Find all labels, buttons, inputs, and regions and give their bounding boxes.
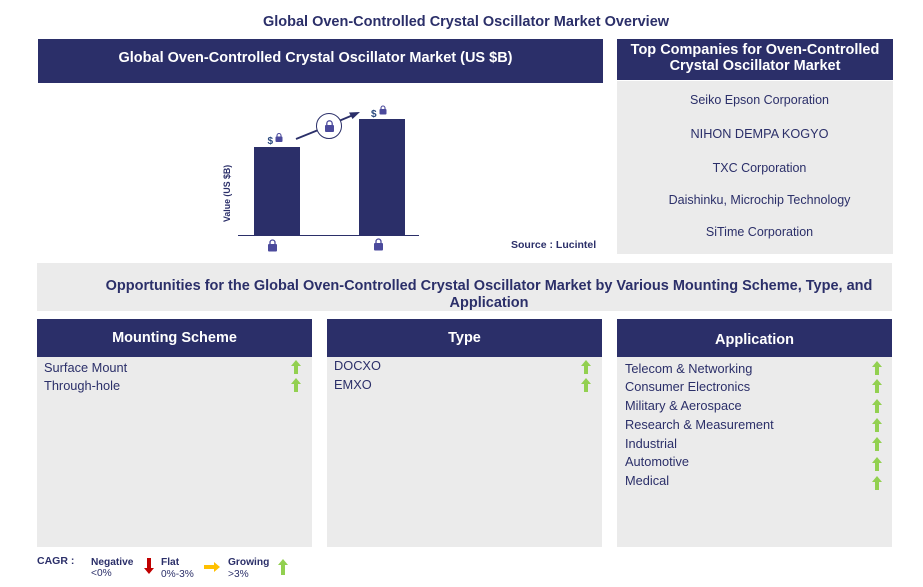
CAGR circle with lock xyxy=(316,114,342,138)
panel: mounting scheme xyxy=(37,319,312,547)
companies header: Crystal Oscillator Market xyxy=(670,58,840,74)
flat label xyxy=(161,557,194,580)
companies panel xyxy=(617,81,893,254)
item: EMXO xyxy=(334,377,372,392)
item: Research & Measurement xyxy=(625,417,774,432)
green up arrow xyxy=(278,559,288,575)
heading: Type xyxy=(448,330,481,346)
arrow xyxy=(291,378,301,392)
company: NIHON DEMPA KOGYO xyxy=(691,127,828,141)
growing label: Growing xyxy=(228,557,269,568)
value label left: $ xyxy=(268,136,274,147)
item: Industrial xyxy=(625,436,677,451)
companies header xyxy=(617,39,893,80)
item: Medical xyxy=(625,473,669,488)
heading: Mounting Scheme xyxy=(112,330,237,346)
chart panel header: Global Oven-Controlled Crystal Oscillator Market (US $B) xyxy=(118,50,512,66)
negative label: <0% xyxy=(91,568,112,579)
CAGR legend xyxy=(37,555,288,580)
value label right: $ xyxy=(371,109,377,120)
growing label: >3% xyxy=(228,569,249,580)
companies header: Top Companies for Oven-Controlled xyxy=(631,42,879,58)
arrow xyxy=(872,457,882,471)
arrow xyxy=(872,361,882,375)
item: DOCXO xyxy=(334,358,381,373)
value label right xyxy=(371,106,386,120)
company: SiTime Corporation xyxy=(706,225,813,239)
item: Surface Mount xyxy=(44,360,127,375)
growing label xyxy=(228,557,269,580)
panel: application xyxy=(617,319,892,547)
panel: type xyxy=(327,319,602,547)
item: Military & Aerospace xyxy=(625,398,742,413)
opportunities heading: Opportunities for the Global Oven-Controlled Crystal Oscillator Market by Various Mounting Scheme, Type, and Application xyxy=(106,278,872,311)
company: Seiko Epson Corporation xyxy=(690,93,829,107)
bars xyxy=(254,119,405,235)
heading: Application xyxy=(715,332,794,348)
value label left xyxy=(268,134,282,147)
arrow xyxy=(872,418,882,432)
opportunities heading xyxy=(37,263,892,311)
red down arrow xyxy=(144,558,154,574)
arrow xyxy=(872,476,882,490)
legend title: CAGR : xyxy=(37,555,74,567)
item: Automotive xyxy=(625,454,689,469)
arrow xyxy=(872,437,882,451)
chart panel header xyxy=(38,39,603,83)
arrow xyxy=(581,378,591,392)
y axis label: Value (US $B) xyxy=(222,165,232,222)
negative label xyxy=(91,557,134,579)
arrow xyxy=(581,360,591,374)
heading xyxy=(327,319,602,357)
arrow xyxy=(291,360,301,374)
x axis xyxy=(238,235,419,236)
company: TXC Corporation xyxy=(713,161,806,175)
source note: Source : Lucintel xyxy=(511,239,596,251)
negative label: Negative xyxy=(91,557,133,568)
arrow xyxy=(872,379,882,393)
title: Global Oven-Controlled Crystal Oscillator Market Overview xyxy=(263,14,669,30)
company: Daishinku, Microchip Technology xyxy=(669,193,850,207)
bar chart xyxy=(222,106,419,252)
flat label: Flat xyxy=(161,557,179,568)
item: Through-hole xyxy=(44,378,120,393)
flat label: 0%-3% xyxy=(161,569,194,580)
heading xyxy=(617,319,892,357)
category lock right xyxy=(374,239,383,250)
item: Telecom & Networking xyxy=(625,361,752,376)
heading xyxy=(37,319,312,357)
arrow xyxy=(872,399,882,413)
yellow right arrow xyxy=(204,562,220,572)
growth arrow xyxy=(296,112,360,139)
category lock left xyxy=(268,240,277,252)
item: Consumer Electronics xyxy=(625,379,750,394)
